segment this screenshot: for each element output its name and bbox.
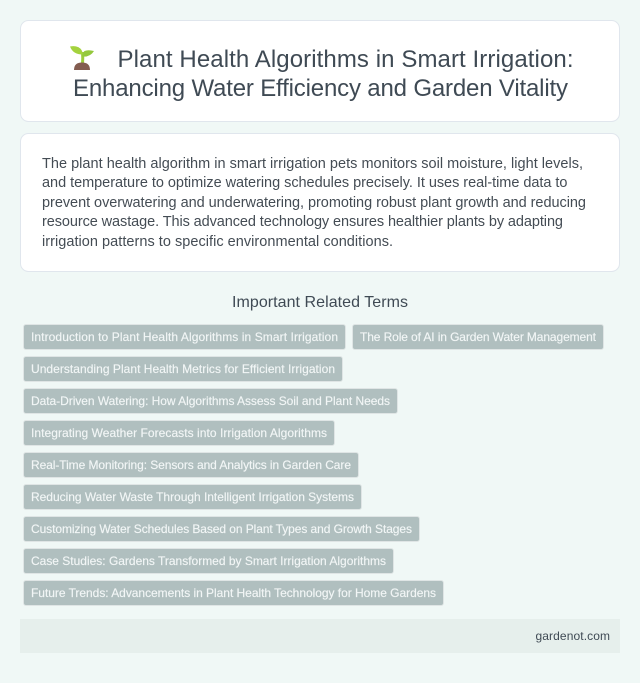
tag 1 xyxy=(24,324,346,350)
tag 6: Real-Time Monitoring: Sensors and Analytics in Garden Care xyxy=(31,458,351,472)
description text xyxy=(42,156,586,250)
description text: The plant health algorithm in smart irrigation pets monitors soil moisture, light levels, xyxy=(42,156,583,172)
title text: Plant Health Algorithms in Smart Irrigation: xyxy=(118,46,574,73)
tag 9 xyxy=(24,548,394,574)
description text: resource wastage. This advanced technology ensures healthier plants by adapting xyxy=(42,214,563,230)
tag 5: Integrating Weather Forecasts into Irrigation Algorithms xyxy=(31,426,327,440)
panel: description card xyxy=(20,134,620,272)
tag 8: Customizing Water Schedules Based on Plant Types and Growth Stages xyxy=(31,522,412,536)
tag 7 xyxy=(24,484,362,510)
footer source text: gardenot.com xyxy=(536,629,610,643)
tag 10 xyxy=(24,580,444,606)
tag 9: Case Studies: Gardens Transformed by Smart Irrigation Algorithms xyxy=(31,554,386,568)
panel: title card xyxy=(20,20,620,122)
tag 5 xyxy=(24,420,334,446)
tag 4: Data-Driven Watering: How Algorithms Assess Soil and Plant Needs xyxy=(31,394,390,408)
tag 8 xyxy=(24,516,420,542)
description text: irrigation patterns to specific environmental conditions. xyxy=(42,234,393,250)
tag 2 xyxy=(352,324,604,350)
title text: Enhancing Water Efficiency and Garden Vitality xyxy=(73,75,568,102)
description text: prevent overwatering and underwatering, promoting robust plant growth and reducing xyxy=(42,195,586,211)
tag 10: Future Trends: Advancements in Plant Health Technology for Home Gardens xyxy=(31,586,436,600)
tag 3 xyxy=(24,356,342,382)
tag 4 xyxy=(24,388,398,414)
tag 2: The Role of AI in Garden Water Management xyxy=(360,330,597,344)
tag 3: Understanding Plant Health Metrics for Efficient Irrigation xyxy=(31,362,335,376)
title text xyxy=(73,46,574,102)
tag list xyxy=(24,324,604,606)
tag 1: Introduction to Plant Health Algorithms in Smart Irrigation xyxy=(31,330,338,344)
tag 7: Reducing Water Waste Through Intelligent Irrigation Systems xyxy=(31,490,354,504)
tag 6 xyxy=(24,452,358,478)
footer bar xyxy=(20,619,620,653)
heading: important related terms: Important Related Terms xyxy=(232,294,408,311)
icon: seedling xyxy=(70,46,94,70)
description text: and temperature to optimize watering schedules precisely. It uses real-time data to xyxy=(42,175,568,191)
